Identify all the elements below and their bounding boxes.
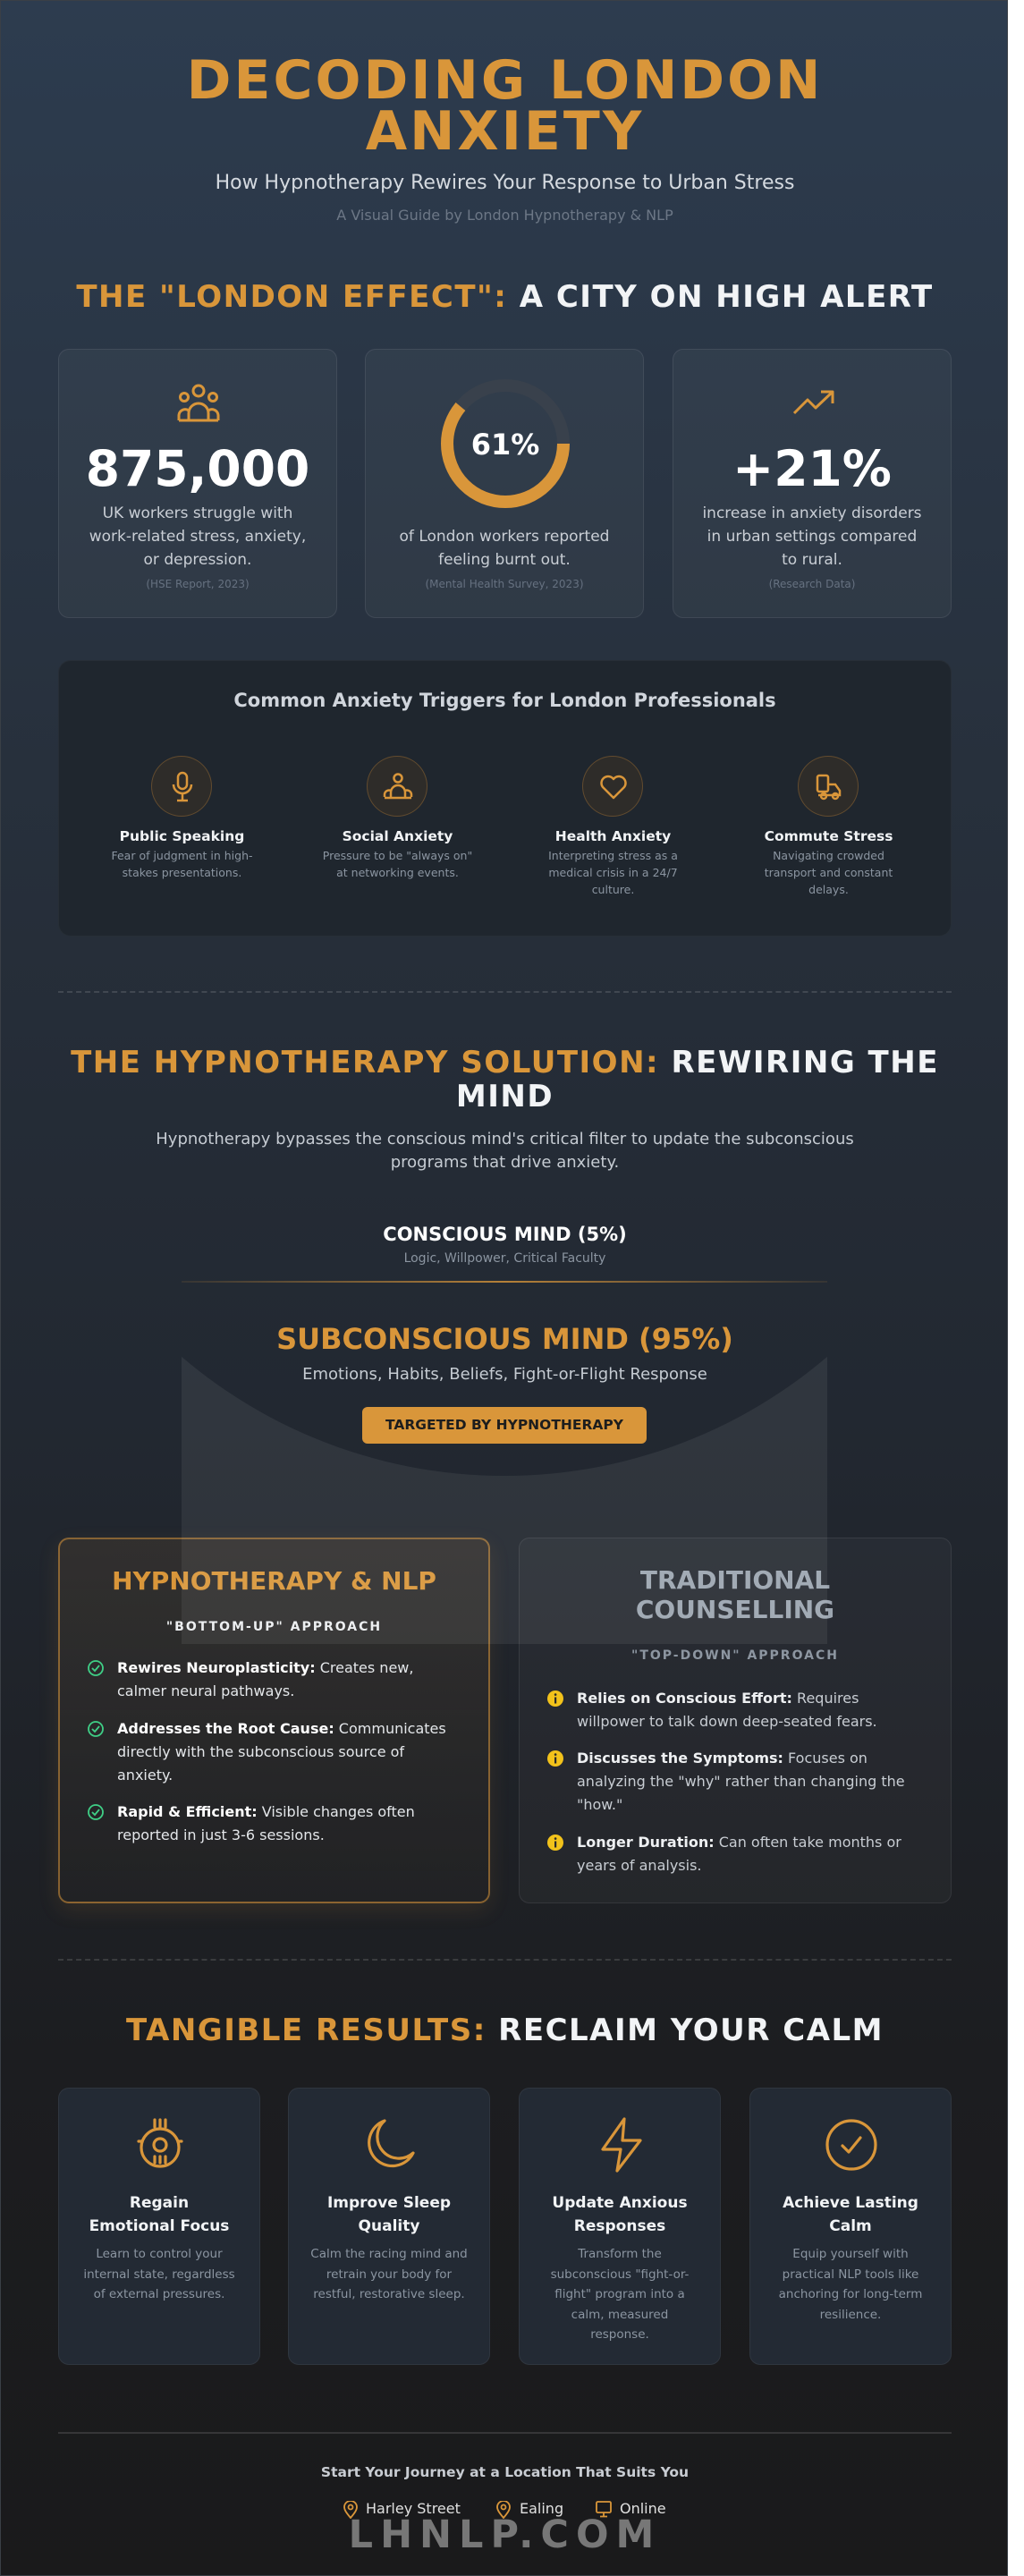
conscious mind label: CONSCIOUS MIND (5%)	[383, 1224, 627, 1245]
description: increase in anxiety disorders	[702, 504, 922, 522]
source: (HSE Report, 2023)	[146, 578, 250, 590]
trigger: public speaking	[111, 756, 253, 879]
result card: sleep: Calm the racing mind and retrain your body for restful, restorative sleep.	[310, 2247, 468, 2301]
subconscious label: SUBCONSCIOUS MIND (95%)	[276, 1322, 733, 1356]
item: rapid: Rapid & Efficient: Visible changes often reported in just 3-6 sessions.	[117, 1803, 415, 1843]
trigger: commute stress: Navigating crowded transport and constant delays.	[765, 849, 893, 896]
icon: trend up	[793, 390, 834, 414]
icon: people	[177, 385, 220, 422]
heading: hypnotherapy solution: THE HYPNOTHERAPY SOLUTION: REWIRING THE	[71, 1045, 939, 1080]
source: (Research Data)	[769, 578, 855, 590]
footer locations: Online	[620, 2500, 666, 2517]
intro paragraph: Hypnotherapy bypasses the conscious mind's critical filter to update the subconscious	[156, 1130, 854, 1148]
panel title	[636, 1565, 834, 1624]
title: ANXIETY	[366, 100, 644, 163]
approach label: "TOP-DOWN" APPROACH	[631, 1648, 839, 1663]
result card: sleep: Quality	[359, 2217, 419, 2235]
result card: lasting calm: Calm	[829, 2217, 872, 2235]
subtitle: How Hypnotherapy Rewires Your Response to Urban Stress	[216, 172, 794, 194]
number: 875,000	[86, 440, 309, 497]
panel title: TRADITIONAL	[640, 1565, 830, 1595]
badge: TARGETED BY HYPNOTHERAPY	[385, 1417, 623, 1433]
trigger: health anxiety	[548, 756, 678, 896]
intro paragraph: programs that drive anxiety.	[391, 1153, 619, 1172]
result card: lasting calm: Achieve Lasting	[783, 2194, 918, 2212]
result card: emotional focus: Emotional Focus	[89, 2217, 229, 2235]
description: of London workers reported	[400, 528, 609, 546]
result card: anxious responses	[519, 2088, 721, 2365]
description: or depression.	[144, 551, 251, 569]
title	[187, 49, 823, 163]
item: conscious effort: Relies on Conscious Effort: Requires willpower to talk down deep-seated fears.	[577, 1690, 877, 1730]
footer locations: Ealing	[520, 2500, 563, 2517]
trigger: health anxiety: Interpreting stress as a medical crisis in a 24/7 culture.	[548, 849, 678, 896]
conscious sub: Logic, Willpower, Critical Faculty	[404, 1251, 605, 1266]
description: feeling burnt out.	[438, 551, 571, 569]
trigger: commute stress	[765, 756, 893, 896]
footer locations: Harley Street	[366, 2500, 461, 2517]
result card: emotional focus	[58, 2088, 260, 2365]
footer heading: Start Your Journey at a Location That Suits You	[321, 2464, 689, 2480]
tagline: A Visual Guide by London Hypnotherapy & NLP	[336, 207, 673, 224]
trigger: social anxiety	[323, 756, 472, 879]
description: work-related stress, anxiety,	[89, 528, 306, 546]
diagram: mind iceberg	[182, 1224, 827, 1644]
description: in urban settings compared	[707, 528, 917, 546]
description	[89, 504, 306, 569]
result card: anxious responses: Responses	[574, 2217, 665, 2235]
result card: anxious responses: Update Anxious	[552, 2194, 688, 2212]
trigger: social anxiety: Pressure to be "always on" at networking events.	[323, 849, 472, 879]
brand watermark: LHNLP.COM	[349, 2512, 661, 2557]
footer locations	[343, 2500, 666, 2519]
result card: sleep: Improve Sleep	[327, 2194, 451, 2212]
heading: tangible results: TANGIBLE RESULTS: RECLAIM YOUR CALM	[126, 2012, 884, 2048]
item: symptoms: Discusses the Symptoms: Focuses on analyzing the "why" rather than changing the "how."	[577, 1750, 905, 1813]
result card: anxious responses: Transform the subconscious "fight-or-flight" program into a calm, measured response.	[551, 2247, 689, 2342]
description: UK workers struggle with	[103, 504, 292, 522]
title: DECODING LONDON	[187, 49, 823, 112]
badge	[362, 1407, 647, 1444]
panel: anxiety triggers	[58, 660, 952, 936]
panel title: HYPNOTHERAPY & NLP	[112, 1566, 436, 1596]
intro paragraph	[156, 1130, 854, 1172]
heading: hypnotherapy solution: MIND	[456, 1079, 554, 1114]
donut chart: 61%	[471, 428, 539, 462]
trigger: public speaking: Fear of judgment in high-stakes presentations.	[111, 849, 253, 879]
source: (Mental Health Survey, 2023)	[425, 578, 584, 590]
stat card: 875,000	[58, 349, 337, 618]
trigger: health anxiety: Health Anxiety	[555, 828, 671, 844]
item: root cause: Addresses the Root Cause: Communicates directly with the subconscious source of anxiety.	[117, 1720, 446, 1784]
heading: hypnotherapy solution	[71, 1045, 939, 1114]
heading: london effect: THE "LONDON EFFECT": A CITY ON HIGH ALERT	[76, 279, 934, 315]
description: to rural.	[782, 551, 842, 569]
description	[702, 504, 922, 569]
trigger: social anxiety: Social Anxiety	[343, 828, 453, 844]
trigger: commute stress: Commute Stress	[765, 828, 893, 844]
donut chart	[441, 391, 570, 508]
item: neuroplasticity: Rewires Neuroplasticity: Creates new, calmer neural pathways.	[117, 1659, 413, 1699]
panel title: COUNSELLING	[636, 1595, 834, 1624]
approach label: "BOTTOM-UP" APPROACH	[166, 1620, 382, 1634]
stat card: +21%	[673, 349, 952, 618]
result card: emotional focus: Learn to control your internal state, regardless of external pressures.	[83, 2247, 235, 2301]
number: +21%	[732, 440, 892, 497]
stat card: 61%	[365, 349, 644, 618]
subconscious shape	[182, 1281, 827, 1644]
item: duration: Longer Duration: Can often take months or years of analysis.	[577, 1834, 901, 1874]
result card: lasting calm	[749, 2088, 952, 2365]
panel: traditional counselling	[519, 1538, 952, 1903]
result card: lasting calm: Equip yourself with practical NLP tools like anchoring for long-term resilience.	[779, 2247, 922, 2322]
trigger: public speaking: Public Speaking	[120, 828, 244, 844]
panel heading: Common Anxiety Triggers for London Professionals	[233, 690, 776, 711]
result card: emotional focus: Regain	[130, 2194, 189, 2212]
description	[400, 528, 609, 569]
panel: hypnotherapy & nlp	[58, 1538, 490, 1903]
subconscious sub: Emotions, Habits, Beliefs, Fight-or-Flight Response	[302, 1365, 707, 1384]
result card: sleep	[288, 2088, 490, 2365]
